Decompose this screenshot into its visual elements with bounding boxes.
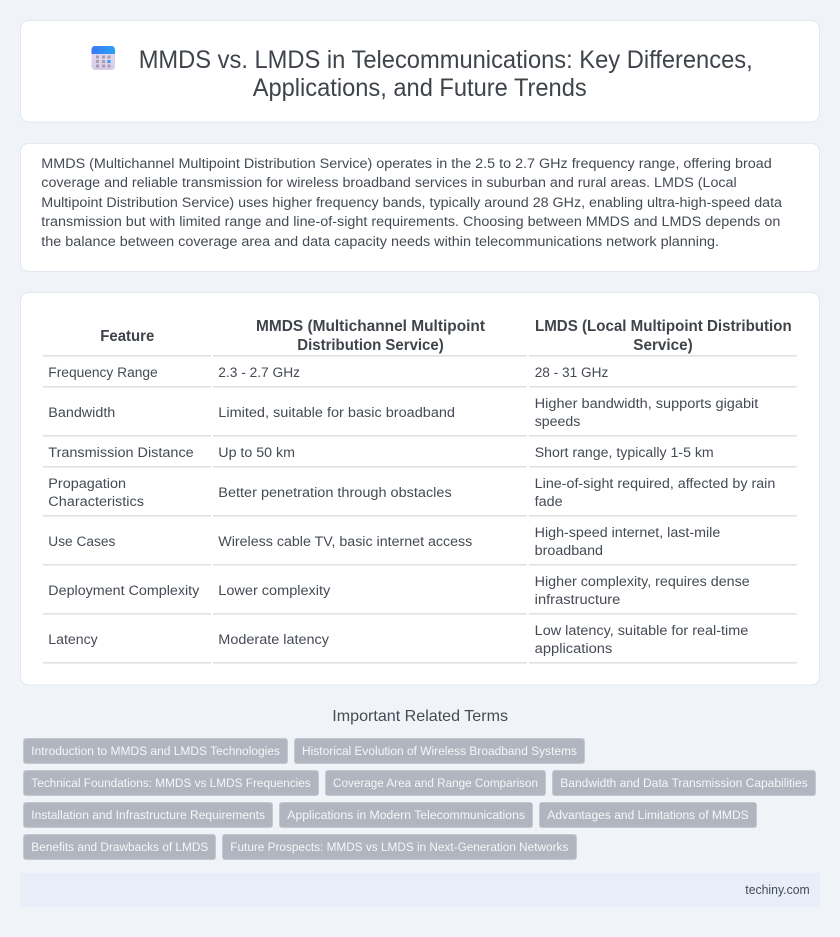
table header row: Distribution Service) — [297, 337, 444, 354]
table header row: MMDS (Multichannel Multipoint — [256, 318, 485, 335]
row: latency: Moderate latency — [218, 632, 330, 648]
tag: Introduction to MMDS and LMDS Technologies — [31, 744, 280, 758]
row: deployment complexity — [48, 574, 750, 608]
panel: introduction — [20, 144, 820, 272]
table header row: Service) — [633, 337, 693, 354]
tag: Coverage Area and Range Comparison — [333, 776, 538, 790]
row: bandwidth: Limited, suitable for basic broadband — [218, 405, 455, 421]
footer — [20, 873, 820, 907]
tag — [552, 770, 816, 796]
intro text block: Multipoint Distribution Service) uses higher frequency bands, typically around 28 GHz, enabling ultra-high-speed data — [41, 195, 782, 211]
section heading: related terms: Important Related Terms — [332, 708, 508, 725]
row: bandwidth: Bandwidth — [48, 405, 115, 421]
row: deployment complexity: Lower complexity — [218, 583, 331, 599]
row: propagation characteristics: Propagation — [48, 476, 126, 492]
panel: header — [20, 20, 820, 122]
panel: comparison table — [20, 292, 820, 685]
title — [139, 46, 753, 102]
title: MMDS vs. LMDS in Telecommunications: Key Differences, — [139, 46, 753, 74]
row: transmission distance: Up to 50 km — [218, 445, 295, 461]
panel: related term tags — [24, 738, 816, 860]
intro text block: MMDS (Multichannel Multipoint Distribution Service) operates in the 2.5 to 2.7 GHz frequency range, offering broad — [41, 156, 772, 172]
tag — [24, 834, 216, 860]
row: use cases: High-speed internet, last-mile — [535, 525, 720, 541]
footer: techiny.com — [745, 882, 810, 897]
row: use cases: Wireless cable TV, basic internet access — [218, 534, 472, 550]
row: latency: applications — [535, 641, 612, 657]
row: propagation characteristics: Better penetration through obstacles — [218, 485, 452, 501]
row: transmission distance: Short range, typically 1-5 km — [535, 445, 714, 461]
row: latency: Latency — [48, 632, 99, 648]
tag: Benefits and Drawbacks of LMDS — [31, 840, 208, 854]
tag — [280, 802, 532, 828]
table header row — [100, 318, 792, 354]
table header row: LMDS (Local Multipoint Distribution — [535, 318, 792, 335]
row: frequency range: 28 - 31 GHz — [535, 365, 608, 381]
row: latency: Low latency, suitable for real-time — [535, 623, 748, 639]
tag — [24, 770, 318, 796]
tag — [294, 738, 584, 764]
tag — [326, 770, 546, 796]
intro text block: transmission but with limited range and line-of-sight requirements. Choosing between MMDS and LMDS depends on — [41, 214, 780, 230]
title: Applications, and Future Trends — [253, 74, 587, 102]
tag: Future Prospects: MMDS vs LMDS in Next-Generation Networks — [230, 840, 568, 854]
intro text block — [41, 156, 782, 250]
row: propagation characteristics: fade — [535, 494, 563, 510]
row: frequency range — [48, 365, 608, 381]
table header row: Feature — [100, 328, 155, 345]
tag: Advantages and Limitations of MMDS — [547, 808, 749, 822]
row: transmission distance — [48, 445, 714, 461]
icon: calendar — [92, 46, 115, 70]
row: use cases: Use Cases — [48, 534, 115, 550]
row: latency — [48, 623, 748, 657]
row: use cases: broadband — [535, 543, 603, 559]
row: use cases — [48, 525, 720, 559]
tag: Bandwidth and Data Transmission Capabilities — [560, 776, 808, 790]
tag: Technical Foundations: MMDS vs LMDS Frequencies — [31, 776, 311, 790]
tag: Applications in Modern Telecommunications — [287, 808, 525, 822]
row: deployment complexity: Deployment Complexity — [48, 583, 200, 599]
tag: Historical Evolution of Wireless Broadband Systems — [302, 744, 577, 758]
row: frequency range: Frequency Range — [48, 365, 158, 381]
tag — [24, 802, 272, 828]
tag — [540, 802, 756, 828]
row: transmission distance: Transmission Distance — [48, 445, 194, 461]
tag — [222, 834, 576, 860]
row: propagation characteristics: Characteristics — [48, 494, 144, 510]
row: bandwidth: speeds — [535, 414, 580, 430]
row: deployment complexity: infrastructure — [535, 592, 620, 608]
row: propagation characteristics — [48, 476, 775, 510]
row: deployment complexity: Higher complexity, requires dense — [535, 574, 750, 590]
row: propagation characteristics: Line-of-sight required, affected by rain — [535, 476, 775, 492]
row: bandwidth: Higher bandwidth, supports gigabit — [535, 396, 758, 412]
row: bandwidth — [48, 396, 758, 430]
tag: Installation and Infrastructure Requirements — [31, 808, 265, 822]
row: frequency range: 2.3 - 2.7 GHz — [218, 365, 300, 381]
tag — [24, 738, 288, 764]
intro text block: the balance between coverage area and data capacity needs within telecommunications network planning. — [41, 234, 719, 250]
intro text block: coverage and reliable transmission for wireless broadband services in suburban and rural areas. LMDS (Local — [41, 175, 737, 191]
